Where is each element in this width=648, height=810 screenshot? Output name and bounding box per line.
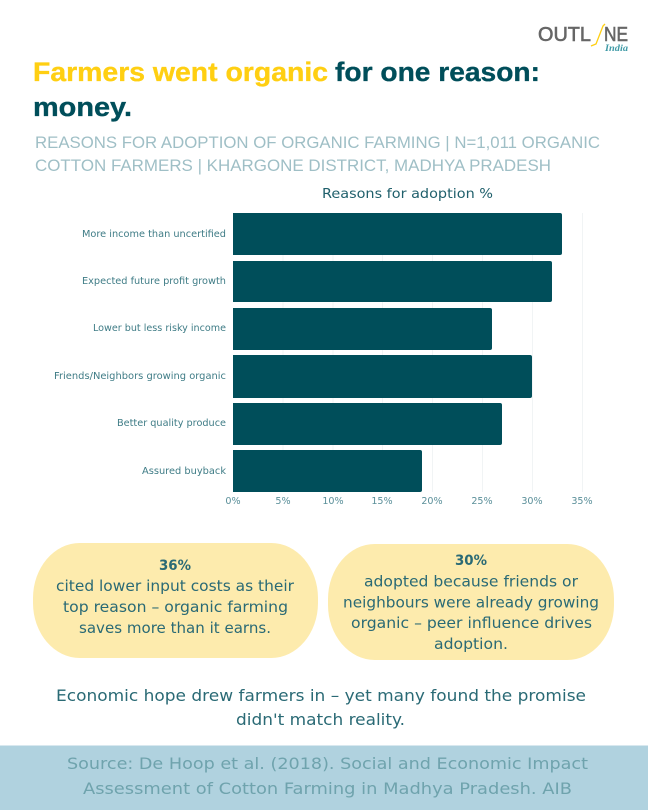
callout: 36% lower input costs: top reason – organic farming — [63, 598, 288, 616]
callout: 36% lower input costs: saves more than it earns. — [79, 619, 271, 637]
axis tick labels — [225, 496, 593, 507]
source banner — [0, 746, 648, 810]
category labels — [54, 229, 226, 477]
subtitle: COTTON FARMERS | KHARGONE DISTRICT, MADHYA PRADESH — [35, 157, 551, 175]
callout: 30% peer influence: neighbours were already growing — [343, 594, 599, 612]
axis tick labels: 35% — [571, 496, 593, 507]
callout: 30% peer influence: organic – peer influence drives — [351, 614, 592, 632]
callout: 30% peer influence: 30% — [455, 552, 487, 569]
axis tick labels: 20% — [421, 496, 443, 507]
subtitle — [35, 134, 600, 175]
grid lines — [283, 213, 582, 492]
bars — [233, 213, 562, 492]
closing statement — [56, 686, 586, 729]
logo: Outline India: India — [604, 43, 629, 53]
subtitle: REASONS FOR ADOPTION OF ORGANIC FARMING | N=1,011 ORGANIC — [35, 134, 600, 152]
logo: Outline India: NE — [604, 23, 628, 46]
callout: 30% peer influence: adopted because friends or — [364, 572, 579, 590]
axis tick labels: 0% — [225, 496, 241, 507]
callout: 36% lower input costs: 36% — [159, 557, 191, 574]
category labels: Lower but less risky income — [93, 323, 226, 334]
callout: 30% peer influence: adoption. — [434, 635, 508, 653]
callout: 30% peer influence — [328, 544, 614, 660]
closing statement: didn't match reality. — [236, 710, 405, 729]
axis tick labels: 15% — [371, 496, 393, 507]
category labels: Expected future profit growth — [82, 276, 226, 287]
logo: Outline India: OUTL — [538, 23, 591, 46]
logo: Outline India — [538, 23, 629, 53]
source banner: Source: De Hoop et al. (2018). Social and Economic Impact — [67, 754, 588, 773]
axis tick labels: 5% — [275, 496, 291, 507]
title — [33, 57, 540, 122]
source banner: Assessment of Cotton Farming in Madhya Pradesh. AIB — [83, 779, 572, 798]
category labels: Friends/Neighbors growing organic — [54, 371, 226, 382]
category labels: More income than uncertified — [82, 229, 226, 240]
axis tick labels: 10% — [322, 496, 344, 507]
title: for one reason: — [335, 57, 540, 87]
callout: 36% lower input costs: cited lower input costs as their — [56, 577, 295, 595]
category labels: Assured buyback — [142, 466, 226, 477]
axis tick labels: 30% — [521, 496, 543, 507]
axis tick labels: 25% — [471, 496, 493, 507]
chart title: Reasons for adoption % — [322, 187, 493, 202]
title: money. — [33, 92, 132, 122]
callout: 36% lower input costs — [33, 543, 318, 658]
title: Farmers went organic — [33, 57, 328, 87]
bar chart: reasons for adoption — [54, 187, 593, 507]
closing statement: Economic hope drew farmers in – yet many found the promise — [56, 686, 586, 705]
category labels: Better quality produce — [117, 418, 226, 429]
